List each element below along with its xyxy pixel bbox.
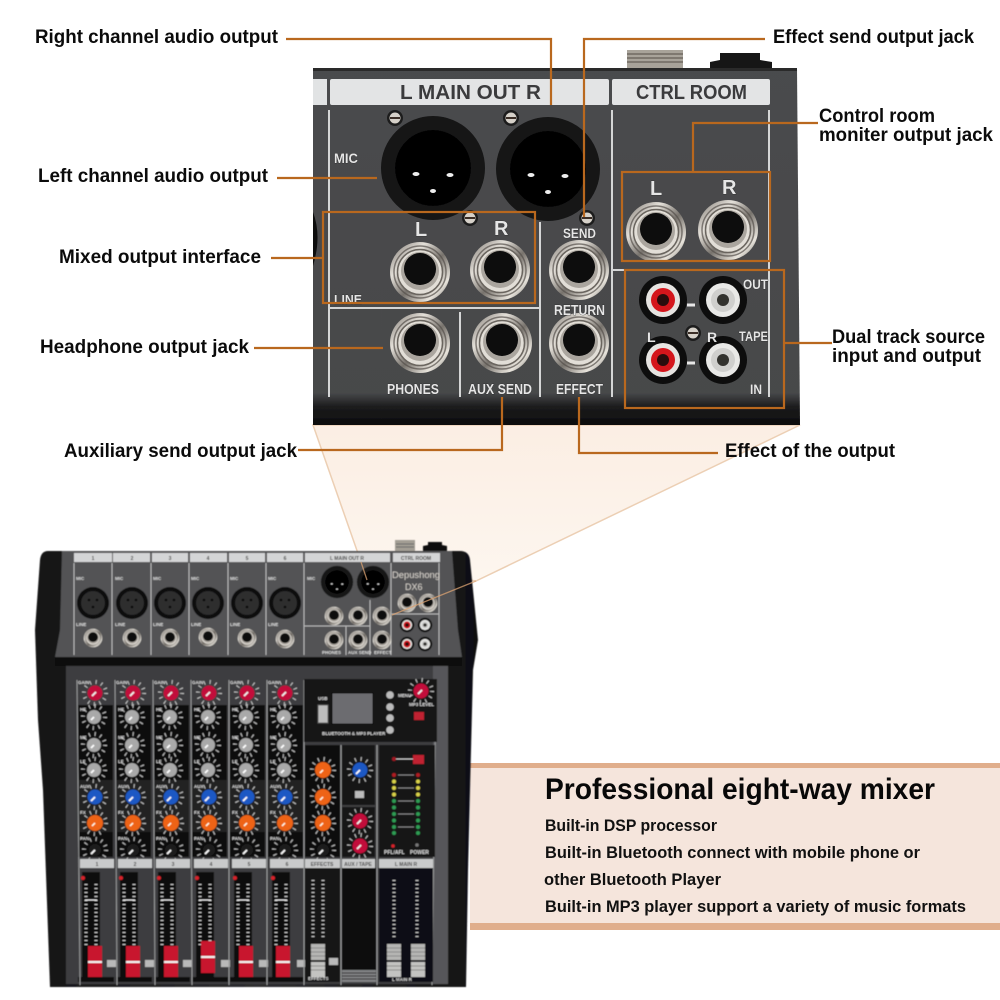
channel control labels: MF (270, 735, 277, 740)
RCA sockets (639, 276, 747, 384)
channel header strips (74, 553, 440, 562)
effects column: EFFECTS (308, 976, 329, 981)
channel control labels: PAN (232, 836, 241, 841)
panel silk-screen labels: TAPE (739, 328, 768, 344)
channel MIC and LINE labels: LINE (191, 622, 201, 627)
channel control labels: GAIN (116, 680, 127, 685)
main section labels (322, 650, 392, 655)
panel silk-screen labels: PHONES (387, 381, 439, 398)
channel MIC and LINE labels: LINE (115, 622, 125, 627)
label: dual track (832, 327, 985, 367)
main section labels: AUX SEND (348, 650, 372, 655)
panel silk-screen labels: L (650, 178, 662, 200)
channel number labels: 2 (134, 862, 137, 868)
brand name (392, 570, 440, 592)
main section labels: PHONES (322, 650, 341, 655)
band bullet list: Built-in DSP processor (545, 817, 718, 835)
channel control labels: MF (232, 735, 239, 740)
channel control labels: HF (156, 707, 162, 712)
channel MIC and LINE labels: MIC (268, 576, 277, 581)
leader: right channel (286, 39, 551, 105)
channel control labels: AUX (232, 784, 242, 789)
channel control labels: LF (80, 759, 86, 764)
channel MIC and LINE labels: MIC (230, 576, 239, 581)
channel control labels: FX (194, 810, 200, 815)
MP3 labels (318, 693, 434, 736)
brand name: DX6 (405, 582, 423, 592)
channel control labels: LF (118, 759, 124, 764)
channel strips (78, 682, 306, 982)
channel header strips: 4 (207, 556, 210, 562)
label: mixed output interface: Mixed output interface (59, 247, 261, 268)
channel control labels: AUX (156, 784, 166, 789)
channel MIC and LINE labels: LINE (268, 622, 278, 627)
panel connector: power socket (710, 53, 772, 68)
header strip CTRL ROOM: CTRL ROOM (636, 82, 747, 104)
top connectors (395, 540, 447, 551)
MP3 labels: USB (318, 696, 328, 701)
channel number labels: 6 (286, 862, 289, 868)
MP3 level knob (410, 680, 432, 702)
+48V switch (392, 755, 424, 764)
band bullet list (544, 817, 966, 916)
channel control labels: GAIN (78, 680, 89, 685)
channel header strips: 3 (169, 556, 172, 562)
info band (470, 763, 1000, 930)
channel MIC and LINE labels (76, 576, 316, 627)
leader: auxiliary send (298, 397, 502, 450)
header strip left (313, 79, 327, 105)
channel control labels: AUX (194, 784, 204, 789)
menu buttons (386, 691, 394, 734)
highlight box: mixed output interface (323, 212, 535, 303)
main meter column: L MAIN R (392, 977, 413, 982)
channel control labels: AUX (80, 784, 90, 789)
lower plate (66, 666, 448, 984)
panel silk-screen labels: R (494, 218, 509, 240)
highlight box: control room jacks (622, 172, 770, 261)
leader: headphone (254, 347, 383, 349)
upper plate (55, 551, 462, 657)
channel control labels: GAIN (268, 680, 279, 685)
label: control room monitor: Control room (819, 106, 935, 127)
label: dual track: input and output (832, 346, 982, 367)
label: control room monitor: moniter output jack (819, 125, 993, 146)
channel control labels: LF (232, 759, 238, 764)
background zoom wedge (313, 425, 800, 581)
panel silk-screen labels: R (707, 329, 717, 345)
channel control labels: PAN (118, 836, 127, 841)
channel header strips: L MAIN OUT R (330, 556, 364, 562)
panel silk-screen labels: L (647, 329, 656, 345)
channel control labels: AUX (118, 784, 128, 789)
aux and tape column: AUX / TAPE (344, 862, 373, 868)
channel control labels: FX (270, 810, 276, 815)
channel control labels: MF (118, 735, 125, 740)
label: dual track: Dual track source (832, 327, 985, 348)
channel control labels: FX (156, 810, 162, 815)
channel number labels: 5 (248, 862, 251, 868)
channel control labels: HF (232, 707, 238, 712)
channel control labels: LF (194, 759, 200, 764)
label: effect of the output: Effect of the output (725, 441, 896, 462)
channel control labels: HF (194, 707, 200, 712)
highlight box: tape RCA (625, 270, 784, 408)
label: effect send output jack: Effect send output jack (773, 27, 974, 48)
header strip CTRL ROOM (612, 79, 770, 105)
channel MIC and LINE labels: MIC (191, 576, 200, 581)
XLR output right (496, 117, 600, 221)
MP3 labels: MENU (398, 693, 411, 698)
red channel faders (88, 941, 290, 977)
panel: enlarged mixer back panel (313, 50, 800, 425)
channel control labels: LF (270, 759, 276, 764)
panel silk-screen labels: MIC (334, 150, 358, 166)
channel control labels: HF (270, 707, 276, 712)
header strip L MAIN OUT R: L MAIN OUT R (400, 82, 542, 104)
label: auxiliary send output jack: Auxiliary send output jack (64, 441, 297, 462)
channel control labels (78, 680, 280, 841)
PFL and power indicators: POWER (410, 850, 429, 856)
leader: left channel (277, 177, 377, 179)
channel input sockets (77, 587, 301, 648)
channel MIC and LINE labels: MIC (115, 576, 124, 581)
channel control labels: LF (156, 759, 162, 764)
panel connector: threaded socket (627, 50, 683, 68)
panel body (313, 68, 800, 425)
channel control labels: GAIN (230, 680, 241, 685)
panel silk-screen labels: RETURN (554, 302, 605, 319)
channel control labels: GAIN (154, 680, 165, 685)
panel silk-screen labels: SEND (563, 225, 596, 241)
USB port (318, 705, 328, 723)
channel control labels: FX (118, 810, 124, 815)
panel silk-screen labels: EFFECT (556, 381, 603, 398)
leader: control room (693, 123, 818, 172)
panel silk-screen labels: AUX SEND (468, 381, 532, 398)
channel header strips: 2 (131, 556, 134, 562)
channel header strips: 1 (92, 556, 95, 562)
label: left channel audio output: Left channel audio output (38, 166, 269, 187)
leader: effect send (584, 39, 765, 217)
channel number labels: 1 (96, 862, 99, 868)
band bullet list: Built-in MP3 player support a variety of music formats (545, 898, 966, 916)
channel number labels (96, 862, 289, 868)
effects column: EFFECTS (311, 862, 334, 868)
channel control labels: AUX (270, 784, 280, 789)
MP3 red button (414, 712, 424, 720)
channel control labels: MF (194, 735, 201, 740)
MP3 player section (304, 679, 437, 742)
channel MIC and LINE labels: MIC (76, 576, 85, 581)
panel screws (387, 110, 701, 341)
header strip L MAIN OUT R (330, 79, 609, 105)
band bullet list: other Bluetooth Player (544, 871, 722, 889)
panel silk-screen labels: LINE (334, 292, 362, 307)
channel control labels: PAN (80, 836, 89, 841)
main output sockets (321, 566, 437, 651)
channel MIC and LINE labels: MIC (307, 576, 316, 581)
mixer product photo (35, 540, 478, 987)
panel silk-screen labels: R (722, 177, 737, 199)
channel number labels: 3 (172, 862, 175, 868)
label: control room monitor (819, 106, 993, 146)
leader: effect output (579, 397, 718, 453)
LED level meter (392, 773, 420, 835)
panel silk-screen labels: OUT (743, 276, 768, 292)
PFL and power indicators (384, 843, 429, 856)
channel MIC and LINE labels: LINE (153, 622, 163, 627)
MP3 labels: BLUETOOTH & MP3 PLAYER (322, 731, 386, 736)
channel MIC and LINE labels: MIC (153, 576, 162, 581)
channel control labels: HF (80, 707, 86, 712)
channel number labels: 4 (210, 862, 213, 868)
channel control labels: MF (80, 735, 87, 740)
brand name: Depushong (392, 570, 440, 580)
PFL and power indicators: PFL/AFL (384, 850, 405, 856)
channel control labels: PAN (156, 836, 165, 841)
band title: Professional eight-way mixer (545, 773, 935, 806)
channel control labels: PAN (270, 836, 279, 841)
channel control labels: HF (118, 707, 124, 712)
panel silk-screen labels: IN (750, 381, 762, 397)
label: headphone output jack: Headphone output jack (40, 337, 249, 358)
leader: mixed output (271, 257, 323, 259)
aux and tape column (342, 745, 376, 982)
channel MIC and LINE labels: LINE (230, 622, 240, 627)
channel header strips: 6 (284, 556, 287, 562)
jack sockets (390, 200, 758, 373)
XLR output left (381, 116, 485, 220)
band bullet list: Built-in Bluetooth connect with mobile phone or (545, 844, 921, 862)
panel silk-screen labels (334, 150, 768, 398)
MP3 labels: MP3 LEVEL (409, 702, 434, 707)
channel header strips: 5 (246, 556, 249, 562)
channel control labels: PAN (194, 836, 203, 841)
channel control labels: MF (156, 735, 163, 740)
channel control labels: FX (232, 810, 238, 815)
leader: dual track (784, 342, 832, 344)
LCD screen (332, 693, 373, 724)
channel control labels: GAIN (192, 680, 203, 685)
neighbouring channel socket edge (313, 212, 318, 266)
panel silk-screen labels: L (415, 219, 427, 241)
main section labels: EFFECT (374, 650, 392, 655)
effects column (305, 745, 340, 982)
channel header strips: CTRL ROOM (401, 556, 431, 562)
zoom wedge lines over mixer (361, 562, 476, 615)
channel control labels: FX (80, 810, 86, 815)
channel MIC and LINE labels: LINE (76, 622, 86, 627)
mixer body (35, 551, 478, 987)
main meter column: L MAIN R (395, 862, 417, 868)
label: right channel audio output: Right channel audio output (35, 27, 279, 48)
main meter column (379, 745, 435, 982)
